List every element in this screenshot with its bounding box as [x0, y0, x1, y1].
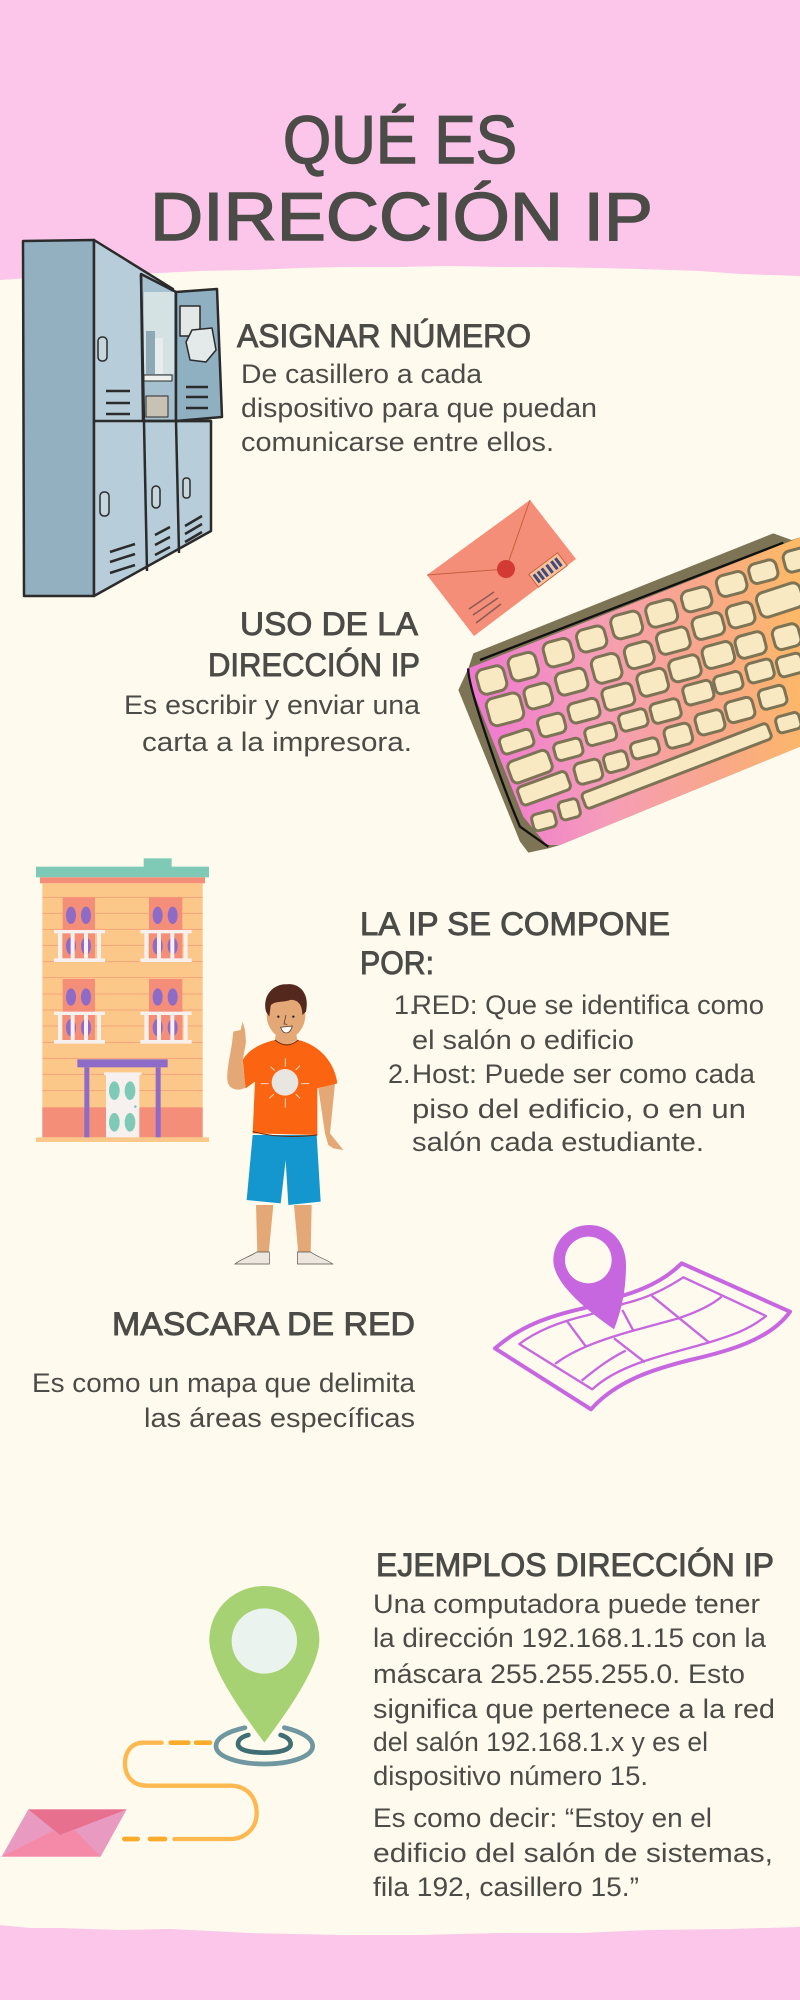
text: ejemplo explicación: Una computadora puede tener: [373, 1589, 760, 1619]
heading: uso de la dirección ip: USO DE LA: [240, 606, 419, 642]
text: asignar número description: comunicarse entre ellos.: [241, 427, 554, 457]
icon: lockers: [23, 240, 222, 596]
top pink banner: [0, 0, 800, 280]
numbered list: red and host: [388, 990, 764, 1157]
title: DIRECCIÓN IP: [150, 179, 653, 255]
text: ejemplo explicación: del salón 192.168.1.x y es el: [373, 1727, 708, 1757]
icon: map with pin: [495, 1225, 790, 1409]
text: analogía casillero: Es como decir: “Estoy en el: [373, 1803, 712, 1833]
text: analogía casillero: edificio del salón de sistemas,: [373, 1838, 773, 1868]
icon: envelope: [427, 500, 576, 636]
text: uso de la dirección ip description: Es escribir y enviar una: [124, 690, 421, 720]
text: uso de la dirección ip description: [124, 690, 421, 757]
heading: máscara de red: MASCARA DE RED: [112, 1306, 415, 1342]
text: asignar número description: De casillero a cada: [241, 359, 483, 389]
numbered list: red and host: salón cada estudiante.: [412, 1127, 704, 1157]
text: máscara de red description: [32, 1368, 416, 1433]
illustration: boy pointing up: [227, 984, 343, 1264]
text: máscara de red description: Es como un mapa que delimita: [32, 1368, 416, 1398]
icon: location pin with path and envelope: [2, 1586, 319, 1857]
numbered list: red and host: el salón o edificio: [412, 1025, 634, 1055]
heading: la ip se compone por: LA IP SE COMPONE: [360, 906, 670, 942]
title: QUÉ ES: [283, 102, 517, 178]
heading: la ip se compone por: [360, 906, 670, 981]
heading: uso de la dirección ip: [208, 606, 420, 683]
icon: building: [36, 858, 209, 1142]
heading: ejemplos dirección ip: EJEMPLOS DIRECCIÓN IP: [376, 1547, 774, 1583]
title: [150, 102, 653, 255]
icon: keyboard: [458, 533, 800, 853]
text: ejemplo explicación: dispositivo número 15.: [373, 1761, 648, 1791]
text: asignar número description: [241, 359, 597, 457]
text: analogía casillero: [373, 1803, 773, 1902]
numbered list: red and host: 2.: [388, 1059, 411, 1089]
text: ejemplo explicación: la dirección 192.168.1.15 con la: [373, 1623, 767, 1653]
numbered list: red and host: piso del edificio, o en un: [412, 1094, 746, 1124]
heading: uso de la dirección ip: DIRECCIÓN IP: [208, 647, 420, 683]
text: ejemplo explicación: [373, 1589, 775, 1791]
numbered list: red and host: RED: Que se identifica como: [412, 990, 764, 1020]
bottom pink banner: [0, 1925, 800, 2000]
heading: asignar número: ASIGNAR NÚMERO: [237, 318, 531, 354]
numbered list: red and host: Host: Puede ser como cada: [412, 1059, 756, 1089]
text: uso de la dirección ip description: carta a la impresora.: [142, 727, 412, 757]
text: ejemplo explicación: máscara 255.255.255.0. Esto: [373, 1659, 745, 1689]
text: ejemplo explicación: significa que pertenece a la red: [373, 1694, 775, 1724]
text: asignar número description: dispositivo para que puedan: [241, 393, 597, 423]
text: analogía casillero: fila 192, casillero 15.”: [373, 1872, 639, 1902]
numbered list: red and host: 1.: [394, 990, 417, 1020]
heading: la ip se compone por: POR:: [360, 945, 434, 981]
text: máscara de red description: las áreas específicas: [144, 1403, 415, 1433]
